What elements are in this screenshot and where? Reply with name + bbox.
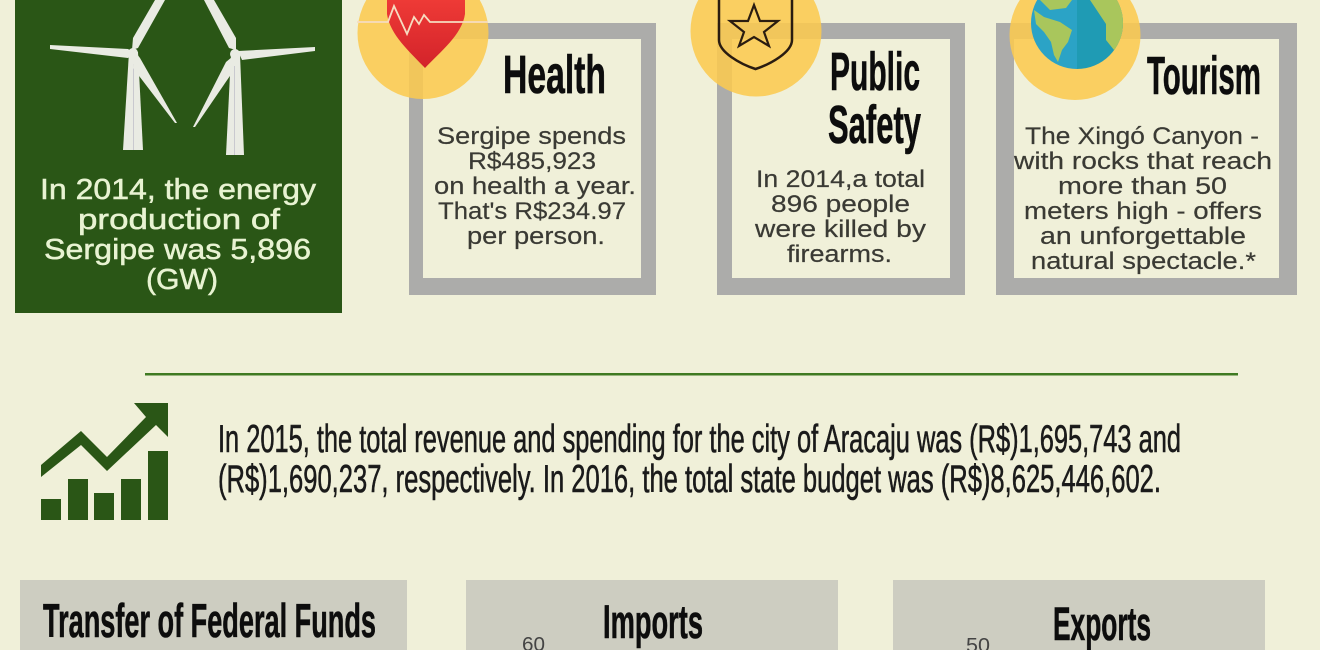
heading: Imports: Imports — [603, 595, 703, 648]
health text: R$485,923 — [468, 148, 596, 175]
energy production text: Sergipe was 5,896 — [44, 234, 311, 266]
public safety text — [754, 166, 926, 268]
public safety text: firearms. — [787, 241, 892, 268]
icon: globe — [1031, 0, 1124, 69]
energy production text: In 2014, the energy — [40, 174, 317, 206]
energy production text: production of — [78, 204, 281, 236]
public safety text: 896 people — [771, 191, 910, 218]
health text — [434, 123, 636, 250]
public safety text: In 2014,a total — [756, 166, 925, 193]
revenue and budget text — [218, 418, 1181, 501]
icon: yellow circle behind globe — [1010, 0, 1140, 100]
panel: public safety — [690, 0, 965, 295]
tourism text — [1013, 123, 1272, 275]
health text: Sergipe spends — [437, 123, 626, 150]
health text: per person. — [467, 223, 605, 250]
health text: That's R$234.97 — [438, 198, 626, 225]
panel: health — [357, 0, 656, 295]
health text: on health a year. — [434, 173, 636, 200]
heading: Public Safety: Safety — [828, 95, 921, 155]
tourism text: with rocks that reach — [1013, 148, 1272, 175]
heading: Transfer of Federal Funds: Transfer of Federal Funds — [43, 594, 376, 647]
icon: yellow circle behind heart — [358, 0, 488, 99]
panel: exports — [893, 580, 1265, 650]
icon: growth chart — [41, 403, 168, 520]
heading: Public Safety — [828, 42, 921, 155]
heading: Exports: Exports — [1053, 597, 1151, 650]
icon: yellow circle behind shield — [690, 0, 822, 96]
tourism text: natural spectacle.* — [1031, 248, 1256, 275]
energy production text — [40, 174, 317, 296]
panel: energy production — [15, 0, 342, 313]
energy production text: (GW) — [146, 264, 218, 296]
heading: Health: Health — [503, 45, 606, 105]
tourism text: The Xingó Canyon - — [1025, 123, 1259, 150]
tourism text: meters high - offers — [1024, 198, 1262, 225]
icon: right wind turbine — [193, 0, 315, 155]
public safety text: were killed by — [754, 216, 926, 243]
tourism text: an unforgettable — [1040, 223, 1246, 250]
panel: tourism — [996, 0, 1297, 295]
heading: Public Safety: Public — [830, 42, 920, 102]
panel: imports — [466, 580, 838, 650]
icon: left wind turbine — [50, 0, 177, 150]
icon: heart with pulse line — [357, 0, 488, 68]
tourism text: more than 50 — [1058, 173, 1227, 200]
panel: transfer of federal funds — [20, 580, 407, 650]
icon: shield with star — [719, 0, 792, 69]
